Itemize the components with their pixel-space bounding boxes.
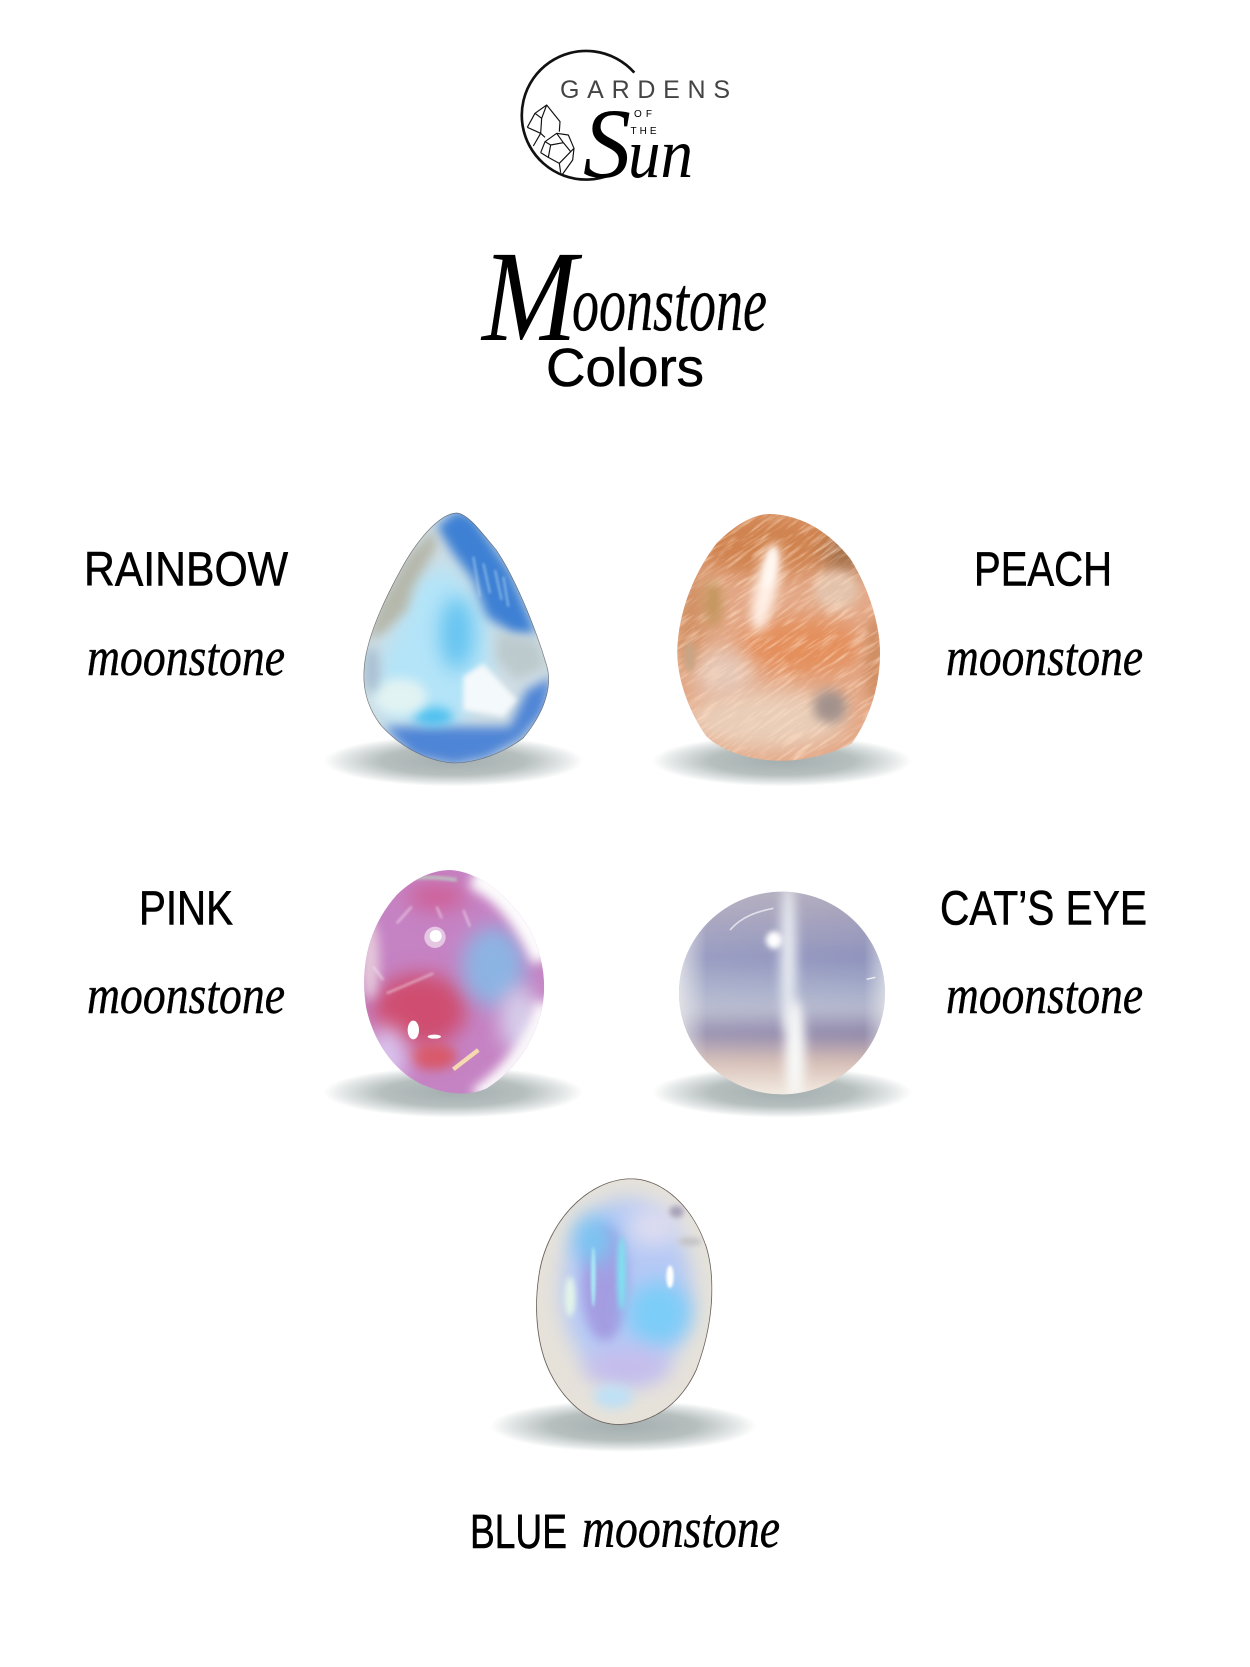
gem shadow [652, 736, 912, 786]
label word: CAT'S EYE: CAT’S EYE [940, 882, 1147, 936]
label: pink moonstone [87, 882, 285, 1025]
oval stone [532, 1175, 718, 1428]
gem: blue moonstone [490, 1175, 757, 1452]
label script: moonstone [87, 627, 285, 687]
logo word: THE: THE [630, 126, 660, 137]
gem: cat's eye moonstone [658, 892, 906, 1116]
label: peach moonstone [946, 544, 1143, 687]
infographic canvas [87, 50, 1146, 1549]
logo word: Sun: un [628, 116, 693, 193]
label word: RAINBOW: RAINBOW [84, 544, 289, 596]
title script: Moonstone: M [480, 225, 583, 369]
label script: moonstone [87, 965, 285, 1025]
gem shadow [323, 1067, 583, 1118]
label word: BLUE: BLUE [470, 1506, 567, 1559]
label script: moonstone [946, 965, 1143, 1025]
title: Colors: Colors [546, 338, 704, 398]
label: cat's eye moonstone [940, 882, 1147, 1025]
gem: peach moonstone [531, 373, 1069, 902]
logo: Gardens of the Sun [522, 51, 730, 199]
label script: moonstone [946, 627, 1143, 687]
oval stone [364, 870, 544, 1094]
title [480, 225, 767, 398]
gem: pink moonstone [323, 867, 583, 1118]
round stone [679, 892, 885, 1094]
gem: rainbow moonstone [323, 510, 583, 786]
label word: PEACH: PEACH [974, 544, 1112, 596]
gem shadow [323, 736, 583, 786]
label: blue moonstone [470, 1498, 780, 1560]
logo word: OF: OF [634, 109, 656, 120]
teardrop stone [360, 510, 557, 767]
logo word: GARDENS: GARDENS [560, 76, 730, 104]
gem shadow [652, 1067, 912, 1118]
label word: PINK: PINK [139, 882, 233, 936]
egg-shaped stone [677, 514, 880, 761]
label script: moonstone [582, 1498, 780, 1560]
label: rainbow moonstone [84, 544, 289, 687]
title script: Moonstone: oonstone [572, 260, 767, 347]
gem shadow [490, 1400, 757, 1452]
logo circle and crystals [522, 51, 634, 180]
logo word: Sun: S [583, 88, 631, 199]
